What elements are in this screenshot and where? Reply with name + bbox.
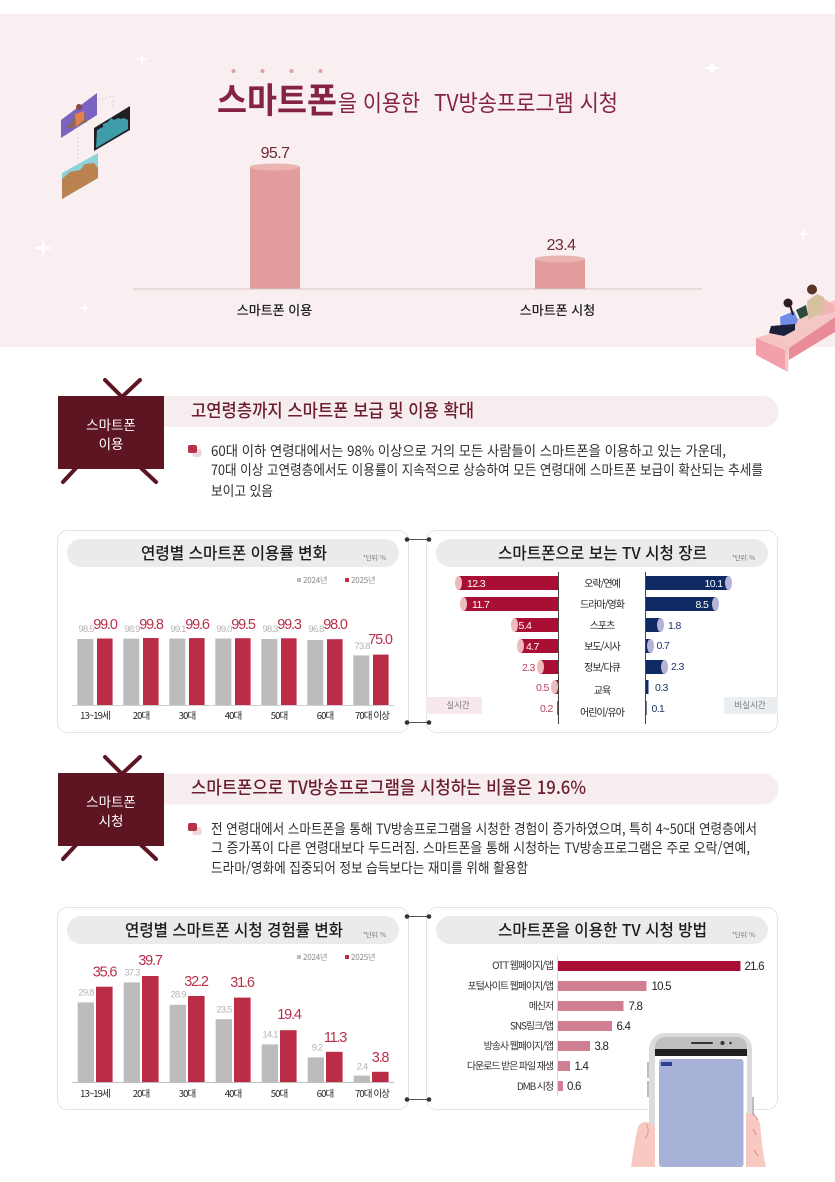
legend: 2024년: [303, 575, 327, 586]
bar chart: viewing experience: 35.6: [93, 964, 117, 980]
panel: smartphone use rate by age: *단위: %: [363, 552, 386, 562]
connector: section 2 top: [405, 914, 431, 919]
connector: section 1 bottom: [405, 720, 431, 725]
chart: genre labels: 정보/다큐: [584, 659, 621, 674]
panel: section 1 tag: 스마트폰: [86, 414, 136, 434]
bar chart: use rate: 98.0: [323, 617, 348, 633]
bar chart: methods: 포털사이트 웹페이지/앱: [467, 978, 554, 992]
bar chart: methods: 21.6: [744, 961, 764, 973]
text block: section 1: 60대 이하 연령대에서는 98% 이상으로 거의 모든 사람들이 스마트폰을 이용하고 있는 가운데,: [211, 441, 726, 461]
title: 을 이용한: [338, 84, 420, 118]
bar chart: viewing experience: 14.1: [262, 1030, 278, 1040]
panel: TV viewing methods: [426, 908, 778, 1110]
panel: TV genres on smartphone: *단위: %: [732, 552, 755, 562]
bar chart: methods: DMB 시청: [517, 1078, 553, 1093]
bar chart: viewing experience: 32.2: [184, 974, 209, 990]
bar chart: use rate: 20대: [133, 708, 149, 722]
bar chart: smartphone use vs viewing: 스마트폰 이용: [237, 300, 312, 319]
text block: section 2: 전 연령대에서 스마트폰을 통해 TV방송프로그램을 시청한 경험이 증가하였으며, 특히 4~50대 연령층에서: [211, 819, 757, 839]
panel: header background: [0, 14, 835, 347]
bar chart: methods: 메신저: [529, 998, 553, 1012]
text block: section 1: 70대 이상 고연령층에서도 이용률이 지속적으로 상승하여 모든 연령대에 스마트폰 보급이 확산되는 추세를: [211, 460, 763, 480]
chart: genre labels: 스포츠: [590, 617, 615, 632]
bar chart: smartphone use vs viewing: 23.4: [547, 237, 576, 254]
bar chart: methods: OTT 웹페이지/앱: [492, 957, 554, 972]
title: [217, 69, 618, 124]
chart: realtime bars: 0.2: [540, 703, 554, 715]
bar chart: smartphone use vs viewing: [133, 145, 702, 319]
chart: realtime bars: 0.5: [536, 682, 550, 694]
chart: non-realtime bars: 1.8: [668, 620, 682, 632]
bar chart: smartphone use vs viewing: 95.7: [261, 145, 290, 162]
bar chart: use rate: 40대: [225, 708, 241, 722]
text block: section 2: 그 증가폭이 다른 연령대보다 두드러짐. 스마트폰을 통해 시청하는 TV방송프로그램은 주로 오락/연예,: [211, 838, 750, 858]
connector: section 1 top: [405, 537, 431, 542]
bar chart: viewing experience: 31.6: [230, 975, 255, 991]
legend: 2025년: [351, 952, 375, 963]
bar chart: viewing experience: 23.5: [216, 1004, 232, 1016]
bar chart: methods: 방송사 웹페이지/앱: [484, 1038, 554, 1052]
legend: 2025년: [351, 575, 375, 586]
chart: non-realtime bars: 0.7: [656, 640, 670, 652]
tag: non-realtime: [724, 697, 778, 714]
panel: smartphone use rate by age: [58, 530, 408, 732]
chart: genre labels: 보도/시사: [584, 638, 621, 653]
bar chart: use rate: 50대: [271, 708, 287, 722]
heading: section 1: [164, 396, 778, 427]
title: TV방송프로그램 시청: [434, 84, 618, 118]
legend: [297, 952, 375, 963]
panel: section 2 tag: [58, 757, 164, 859]
bar chart: methods: 10.5: [652, 981, 671, 993]
bar chart: methods: [467, 955, 764, 1096]
bar chart: viewing experience: 29.8: [78, 988, 94, 998]
chart: non-realtime bars: 2.3: [671, 661, 685, 673]
title: 스마트폰: [217, 73, 337, 124]
bar chart: use rate: 98.9: [124, 624, 140, 635]
heading: section 2: [164, 774, 778, 804]
text block: section 1: 보이고 있음: [211, 481, 273, 501]
panel: section 2 tag: 시청: [99, 810, 123, 830]
panel: TV viewing methods: 스마트폰을 이용한 TV 시청 방법: [498, 917, 707, 941]
chart: realtime bars: 2.3: [522, 662, 536, 674]
chart: genre labels: 교육: [594, 682, 611, 697]
bar chart: viewing experience: 30대: [179, 1086, 195, 1100]
bar chart: viewing experience: 11.3: [324, 1030, 347, 1046]
bar chart: use rate: 30대: [179, 708, 195, 722]
text block: section 2: [188, 819, 757, 878]
bar chart: viewing experience: 39.7: [138, 953, 163, 969]
text block: section 2: 드라마/영화에 집중되어 정보 습득보다는 재미를 위해 활용함: [211, 858, 528, 878]
panel: section 2 tag: 스마트폰: [86, 791, 136, 811]
tag: non-realtime: 비실시간: [734, 699, 766, 711]
bar chart: viewing experience: 50대: [271, 1086, 287, 1100]
icon: video thumbnails: [61, 93, 130, 199]
panel: section 1 tag: 이용: [99, 433, 123, 453]
bar chart: use rate: [72, 617, 394, 722]
chart: realtime bars: 4.7: [526, 641, 540, 653]
bar chart: use rate: 99.0: [216, 624, 232, 635]
bar chart: methods: 1.4: [574, 1061, 589, 1073]
legend: [297, 575, 375, 586]
bar chart: viewing experience: 60대: [317, 1086, 333, 1100]
icon: smartphone held in hands: [631, 1033, 766, 1167]
bar chart: use rate: 99.8: [139, 617, 164, 633]
legend: 2024년: [303, 952, 327, 963]
icon: couple on sofa: [756, 284, 835, 372]
panel: viewing experience by age: 연령별 스마트폰 시청 경험률 변화: [125, 917, 343, 941]
chart: realtime bars: 12.3: [467, 578, 486, 590]
panel: smartphone use rate by age: 연령별 스마트폰 이용률 변화: [141, 540, 327, 564]
bar chart: viewing experience: 19.4: [277, 1007, 302, 1023]
bar chart: use rate: 75.0: [368, 632, 393, 648]
chart: non-realtime bars: 10.1: [704, 578, 723, 590]
bar chart: viewing experience: 20대: [133, 1086, 149, 1100]
bar chart: methods: 다운로드 받은 파일 재생: [467, 1058, 554, 1072]
panel: section 1 tag: [58, 380, 164, 482]
bar chart: methods: 3.8: [594, 1041, 608, 1053]
text block: section 1: [188, 441, 763, 501]
bar chart: viewing experience: 3.8: [372, 1050, 389, 1066]
heading: section 2: 스마트폰으로 TV방송프로그램을 시청하는 비율은 19.6%: [191, 774, 586, 800]
chart: genre labels: [558, 572, 646, 724]
chart: realtime bars: 11.7: [472, 599, 490, 611]
bar chart: methods: 0.6: [567, 1081, 581, 1093]
bar chart: viewing experience: 70대 이상: [355, 1086, 390, 1100]
bar chart: viewing experience: 28.9: [170, 990, 186, 1000]
connector: section 2 bottom: [405, 1097, 431, 1102]
chart: non-realtime bars: 0.1: [652, 703, 665, 715]
panel: viewing experience by age: *단위: %: [363, 929, 386, 939]
chart: realtime bars: 5.4: [518, 620, 532, 632]
bar chart: use rate: 60대: [317, 708, 333, 722]
bar chart: viewing experience: 37.3: [124, 968, 140, 978]
bar chart: viewing experience: 2.4: [357, 1062, 368, 1072]
bar chart: use rate: 96.8: [308, 624, 324, 635]
bar chart: use rate: 98.5: [78, 624, 94, 635]
panel: TV genres on smartphone: 스마트폰으로 보는 TV 시청 장르: [498, 540, 707, 564]
heading: section 1: 고연령층까지 스마트폰 보급 및 이용 확대: [191, 397, 474, 423]
bar chart: methods: 7.8: [628, 1001, 642, 1013]
bar chart: viewing experience: 40대: [225, 1086, 241, 1100]
panel: TV genres on smartphone: [426, 530, 778, 732]
bar chart: use rate: 99.1: [170, 624, 186, 635]
tag: realtime: [426, 697, 482, 714]
bar chart: viewing experience: [72, 953, 394, 1100]
chart: genre labels: 오락/연예: [584, 575, 621, 590]
bar chart: viewing experience: 13~19세: [80, 1086, 110, 1100]
bar chart: use rate: 99.0: [93, 617, 118, 633]
bar chart: use rate: 70대 이상: [355, 708, 390, 722]
bar chart: use rate: 73.8: [354, 641, 370, 652]
bar chart: smartphone use vs viewing: 스마트폰 시청: [520, 300, 595, 319]
panel: viewing experience by age: [58, 908, 408, 1110]
chart: realtime bars: [455, 576, 558, 715]
chart: genre labels: 어린이/유아: [580, 704, 625, 719]
bar chart: methods: SNS링크/앱: [510, 1018, 554, 1032]
bar chart: viewing experience: 9.2: [312, 1042, 323, 1054]
bar chart: use rate: 13~19세: [80, 708, 110, 722]
chart: non-realtime bars: 8.5: [696, 599, 709, 611]
chart: genre labels: 드라마/영화: [580, 596, 625, 611]
bar chart: use rate: 98.3: [262, 624, 278, 635]
chart: non-realtime bars: 0.3: [655, 682, 669, 694]
bar chart: use rate: 99.3: [277, 617, 302, 633]
bar chart: use rate: 99.6: [185, 617, 210, 633]
panel: TV viewing methods: *단위: %: [732, 929, 755, 939]
tag: realtime: 실시간: [446, 699, 470, 711]
bar chart: use rate: 99.5: [231, 617, 256, 633]
bar chart: methods: 6.4: [616, 1021, 631, 1033]
chart: non-realtime bars: [646, 576, 732, 715]
